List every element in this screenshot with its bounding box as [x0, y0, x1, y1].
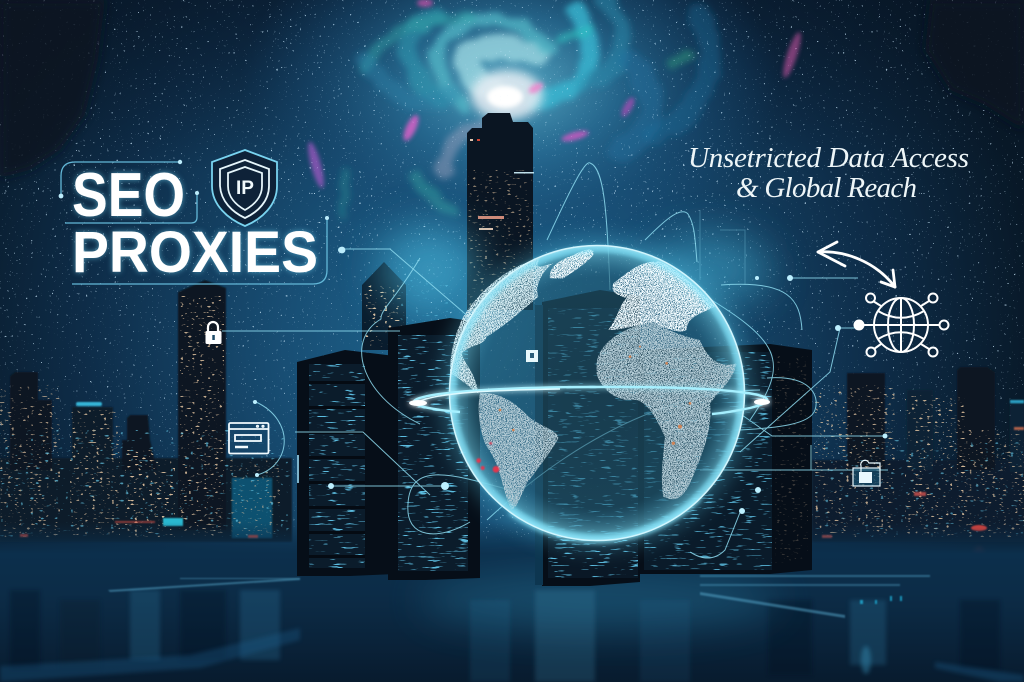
- tagline: Unsetricted Data Access: [688, 142, 969, 174]
- circuit nodes: [253, 247, 888, 514]
- title panel: SEO Proxies: [59, 160, 345, 285]
- lock marker on server: [526, 350, 538, 362]
- icon: two-way arrow: [818, 242, 895, 287]
- south america: [479, 393, 558, 510]
- icon: IP shield: [212, 150, 277, 226]
- title decorative frame: [59, 160, 345, 284]
- server rack: second: [388, 318, 480, 580]
- server rack: far left: [297, 350, 395, 576]
- icon: browser window: [229, 423, 268, 454]
- PROXIES heading: PROXIES: [72, 220, 318, 285]
- icon: padlock: [206, 322, 222, 344]
- left city skyline: [0, 262, 448, 542]
- central skyscraper: [467, 113, 534, 310]
- icon: network globe: [854, 294, 948, 356]
- reflective floor: [0, 522, 1024, 682]
- SEO heading: SEO: [72, 161, 185, 230]
- server rack: right: [640, 344, 812, 574]
- dark corner vignettes: [0, 0, 1024, 178]
- tagline: & Global Reach: [736, 172, 917, 204]
- europe: [608, 262, 715, 332]
- north america: [450, 258, 553, 393]
- tagline: [688, 142, 969, 204]
- spiral galaxy: [240, 0, 804, 260]
- greenland: [550, 249, 594, 278]
- icon: IP shield: IP: [236, 178, 254, 199]
- africa: [597, 322, 737, 499]
- icon: folder lock: [853, 460, 880, 486]
- glow behind globe: [380, 225, 770, 315]
- globe: [441, 237, 753, 549]
- orbit ring: [409, 387, 770, 414]
- server rack: centre: [535, 290, 640, 586]
- city lights and red hotspots: [476, 346, 691, 473]
- right city skyline: [812, 367, 1024, 563]
- data circuit lines: [222, 163, 888, 558]
